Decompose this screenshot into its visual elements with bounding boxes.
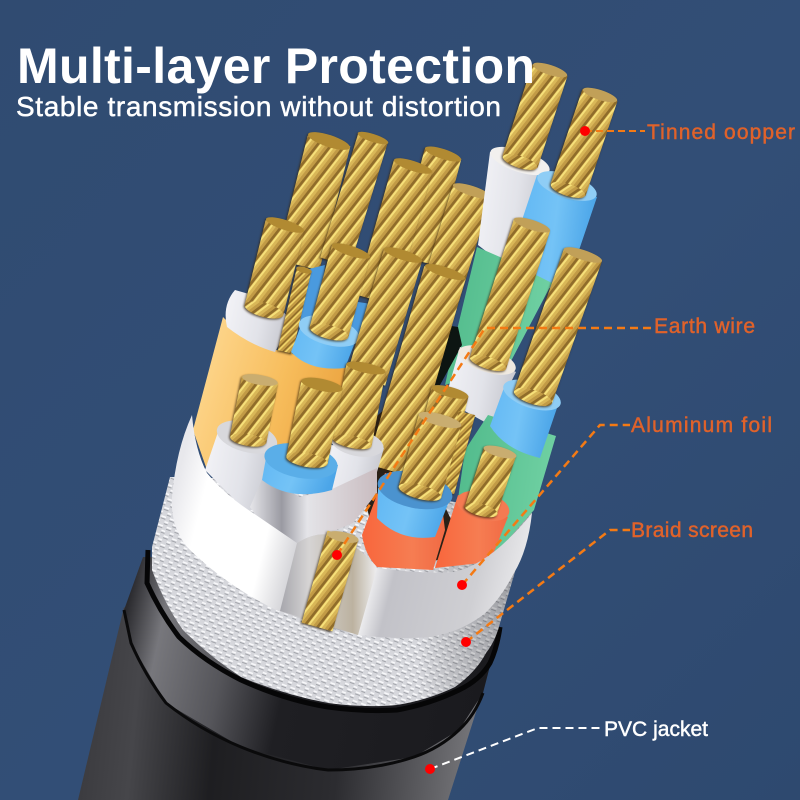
green insulated core — [445, 247, 552, 385]
subtitle: Stable transmission without distortion — [16, 91, 501, 122]
white right sleeve and front conductor — [325, 359, 387, 495]
dark cavity inside the foil — [350, 400, 470, 560]
callout: PVC jacket — [425, 718, 708, 774]
PVC jacket — [78, 550, 500, 800]
orange core right and conductor — [435, 443, 518, 568]
conductor — [366, 244, 424, 380]
black core — [428, 325, 462, 385]
callout: aluminum foil: Aluminum foil — [631, 414, 772, 437]
blue sleeve and front conductor — [262, 375, 344, 494]
blue cores behind — [300, 265, 378, 345]
title: Multi-layer Protection — [17, 38, 535, 94]
callout: braid screen: Braid screen — [631, 519, 753, 542]
thin conductor — [285, 265, 313, 352]
blue sleeve and upper conductor — [523, 85, 619, 290]
white sleeve and upper conductor — [478, 60, 569, 262]
braid screen — [152, 477, 532, 706]
callout: earth wire — [332, 315, 755, 560]
conductor — [388, 261, 467, 470]
conductor — [440, 180, 493, 295]
earth wire conductor — [317, 529, 360, 627]
callout: tinned copper: Tinned oopper — [647, 121, 795, 144]
silver sleeve — [250, 468, 377, 545]
aluminum foil band — [172, 415, 532, 638]
callout: braid screen — [461, 519, 753, 647]
middle conductors — [366, 244, 467, 470]
conductor — [415, 143, 463, 260]
orange core left with blue sleeve — [362, 409, 463, 570]
lower blue sleeve and conductor — [490, 244, 604, 458]
conductor — [298, 128, 352, 265]
white left sleeve and front conductor — [205, 372, 281, 512]
white sleeve and left conductor — [226, 214, 306, 352]
callout: aluminum foil — [457, 414, 772, 590]
blue sleeve and conductor — [291, 240, 372, 369]
back copper conductors — [298, 128, 493, 300]
foil socket around earth wire — [280, 534, 377, 635]
lower white sleeve and conductor — [445, 214, 552, 425]
conductor — [335, 129, 389, 262]
callout: tinned copper — [580, 121, 795, 144]
yellow jacket — [193, 317, 362, 475]
rear copper bundle — [430, 382, 470, 492]
callout: earth wire: Earth wire — [654, 315, 755, 338]
callout: PVC jacket: PVC jacket — [604, 718, 708, 741]
panel: cable illustration — [78, 60, 619, 800]
conductor — [375, 155, 434, 300]
lower green core — [455, 415, 556, 560]
